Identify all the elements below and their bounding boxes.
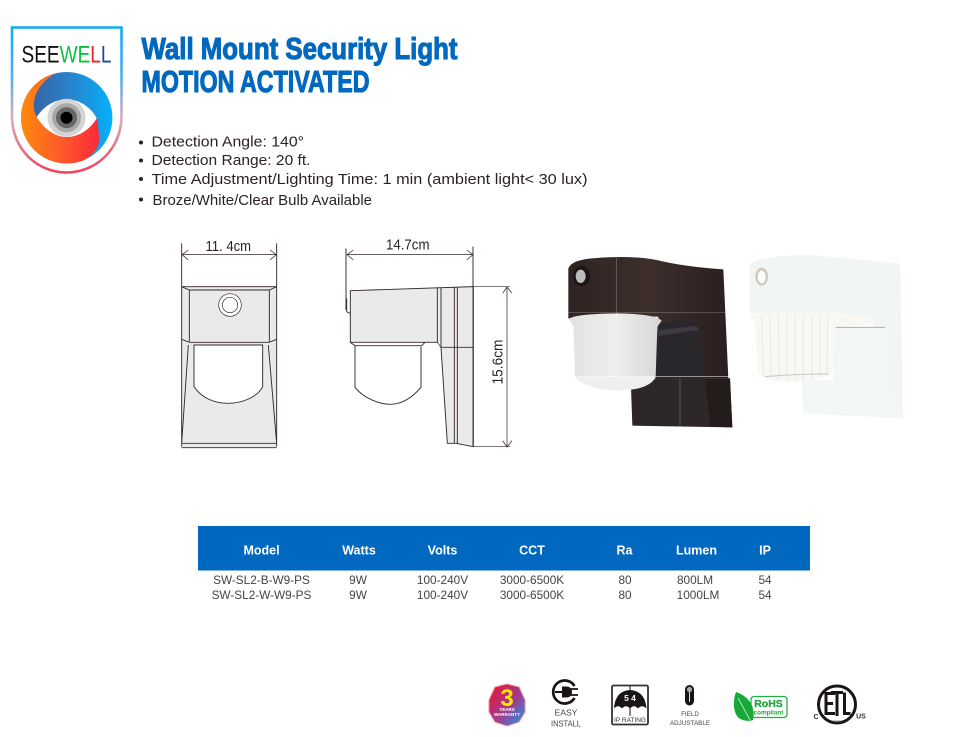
side view dimension drawing [346,247,512,447]
icon: IP rating: 5 4 [624,693,636,703]
table row: SW-SL2-B-W9-PS: 9W [349,573,368,587]
table row: SW-SL2-W-W9-PS [212,588,772,602]
feature list: Detection Range: 20 ft. [152,152,310,169]
icon: RoHS compliant [734,692,787,721]
icon: field adjustable: FIELD [681,711,699,718]
table header: Ra [617,544,634,558]
product photo: bronze light [568,257,732,427]
table row: SW-SL2-W-W9-PS: 54 [758,588,772,602]
icon: easy install: INSTALL [551,718,581,728]
logo: SEEWELL shield [12,28,122,172]
icon: 3 years warranty: WARRANTY [494,712,520,717]
icon: 3 years warranty: YEARS [499,707,515,712]
label: 14.7cm: 14.7cm [386,236,430,254]
table row: SW-SL2-W-W9-PS: 80 [618,588,632,602]
table row: SW-SL2-W-W9-PS: 100-240V [417,588,468,602]
table header: IP [759,544,771,558]
icon: ETL listed: LISTED [831,720,844,724]
front view dimension drawing [182,243,277,448]
table row: SW-SL2-W-W9-PS: 3000-6500K [500,588,564,602]
icon: ETL listed [813,686,866,724]
table row: SW-SL2-W-W9-PS: SW-SL2-W-W9-PS [212,588,312,602]
height dimension arrow [503,287,512,447]
table row: SW-SL2-B-W9-PS: 80 [618,573,632,587]
icon: RoHS compliant: compliant [754,710,784,716]
icon: IP rating: IP RATING [614,717,646,724]
icon: easy install: EASY [555,708,578,718]
icon: field adjustable: ADJUSTABLE [670,720,710,727]
table row: SW-SL2-W-W9-PS: 1000LM [677,588,719,602]
table header: Model [243,544,280,558]
table header: Watts [342,544,376,558]
feature list: Detection Angle: 140° [152,134,304,150]
logo wordmark: SEEWELL [22,42,112,68]
icon: ETL listed: US [856,714,866,720]
width dimension arrow [182,250,276,260]
table header: Lumen [676,544,717,558]
icon: RoHS compliant: RoHS [754,698,783,710]
feature list [139,134,588,209]
table row: SW-SL2-B-W9-PS: 54 [758,573,772,587]
title: MOTION ACTIVATED [142,64,370,99]
table header: Volts [428,544,457,558]
spec table [198,526,810,602]
table row: SW-SL2-W-W9-PS: 9W [349,588,368,602]
label: 11.4cm: 11. 4cm [206,238,251,255]
table header [198,526,810,570]
title [142,31,458,99]
table row: SW-SL2-B-W9-PS: 3000-6500K [500,573,564,587]
table row: SW-SL2-B-W9-PS: 100-240V [417,573,468,587]
icon: easy install [551,680,581,728]
table row: SW-SL2-B-W9-PS: 800LM [677,573,713,587]
label: 15.6cm: 15.6cm [490,340,506,384]
title: Wall Mount Security Light [142,31,458,66]
table row: SW-SL2-B-W9-PS [213,573,772,587]
product photo: white light [750,255,903,418]
icon: 3 years warranty: 3 [500,685,514,712]
icon: IP rating [612,686,648,724]
icon: field adjustable [670,685,710,727]
width dimension arrow [347,250,473,260]
table header: CCT [519,544,545,558]
icon: ETL listed: C [813,714,819,721]
table row: SW-SL2-B-W9-PS: SW-SL2-B-W9-PS [213,573,310,587]
feature list: Time Adjustment/Lighting Time: 1 min (ambient light< 30 lux) [152,171,588,188]
icon: 3 years warranty [489,684,525,726]
feature list: Broze/White/Clear Bulb Available [152,193,372,209]
